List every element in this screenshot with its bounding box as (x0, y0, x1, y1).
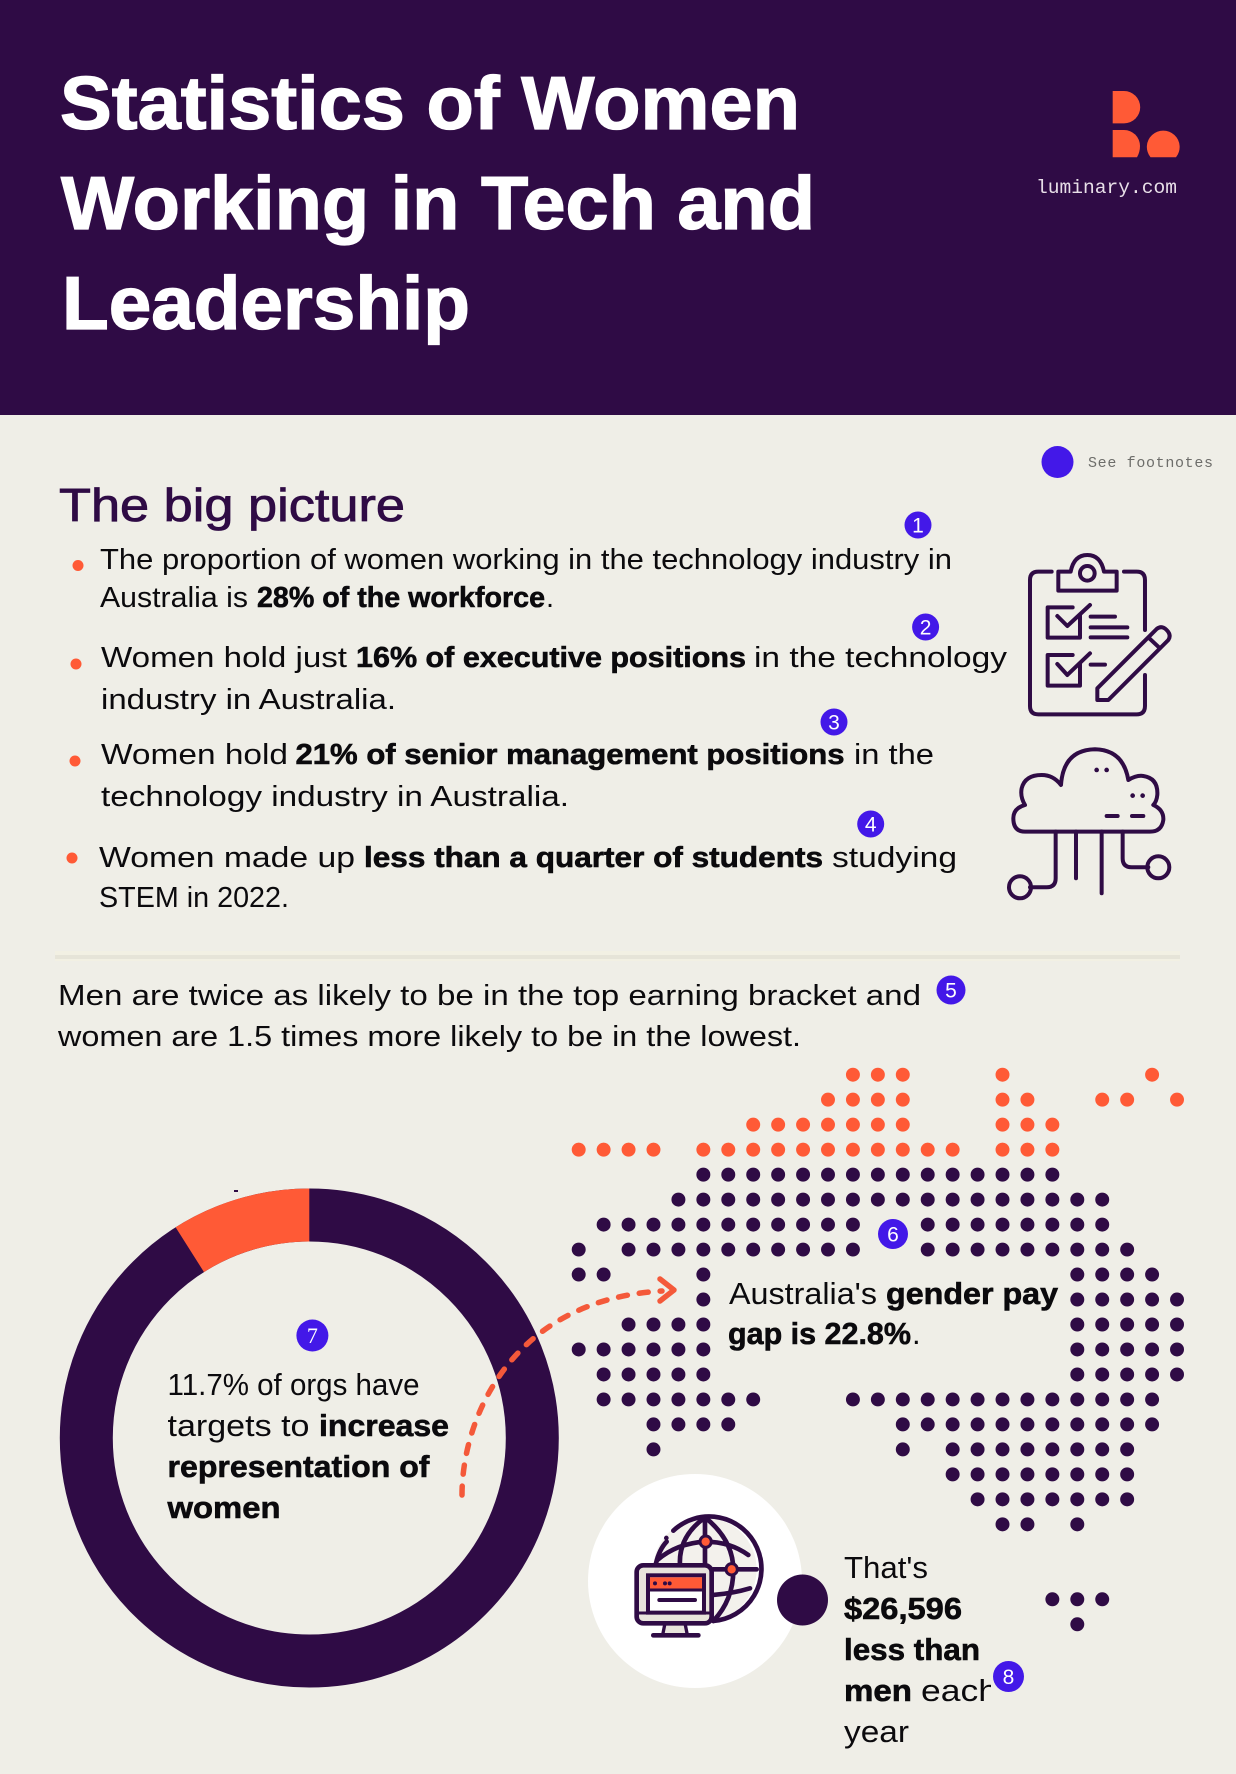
text: earnings bracket statement (57, 980, 921, 1053)
bullet 1: Australia is (100, 582, 248, 614)
footnote marker 2 (912, 614, 939, 640)
text: org targets: 11.7% of orgs have (168, 1367, 420, 1402)
bullet 2: in the technology (754, 642, 1008, 674)
text: org targets (166, 1367, 449, 1525)
bullet 3: in the (854, 739, 934, 771)
arrow: donut to map (462, 1279, 674, 1495)
text: earnings bracket statement: women are 1.5 times more likely to be in the lowest. (57, 1021, 801, 1053)
text: org targets: women (166, 1490, 280, 1525)
bullet 4: STEM in 2022. (99, 882, 289, 914)
dot map of Australia (579, 1075, 1177, 1624)
text: gender pay gap: Australia's (729, 1276, 877, 1311)
bullet 3: 21% of senior management positions (296, 739, 844, 771)
footnote marker 5 (936, 976, 966, 1004)
footnote marker 4: 4 (865, 814, 877, 836)
footnote marker 8 (993, 1661, 1024, 1692)
bullet 1: The proportion of women working in the technology industry in (100, 544, 952, 576)
footnote marker 6: 6 (887, 1224, 899, 1246)
footnote marker 3: 3 (828, 712, 840, 734)
title: Leadership (62, 261, 470, 345)
legend: see footnotes: See footnotes (1088, 455, 1213, 472)
bullet 3: technology industry in Australia. (101, 781, 569, 813)
logo: luminary: luminary.com (1036, 177, 1177, 199)
text: gender pay gap: gap is 22.8% (728, 1316, 911, 1351)
footnote marker 7 (296, 1320, 328, 1352)
icon: cloud network (1009, 749, 1169, 898)
bullet 3 (70, 739, 934, 813)
text: dollar pay difference: year (844, 1714, 909, 1749)
text: dollar pay difference: each (921, 1673, 998, 1708)
text: org targets: representation of (168, 1449, 430, 1484)
title: Working in Tech and (61, 161, 815, 245)
footnote marker 7: 7 (307, 1323, 318, 1348)
footnote marker 4 (857, 810, 884, 838)
title (60, 61, 815, 345)
footnote marker 3 (820, 708, 848, 736)
bullet 4 (66, 842, 957, 914)
text: dollar pay difference: less than (844, 1632, 980, 1667)
bullet 1 (72, 544, 952, 614)
logo: luminary (1036, 91, 1180, 199)
icon: clipboard checklist (1030, 555, 1170, 714)
bullet 2 (70, 642, 1008, 716)
footnote marker 1 (904, 512, 932, 538)
header panel (0, 0, 1236, 415)
bullet 2: Women hold just (101, 642, 347, 674)
bullet 4: studying (832, 842, 957, 874)
title: Statistics of Women (60, 61, 800, 145)
bullet 4: Women made up (99, 842, 355, 874)
text: dollar pay difference: men (844, 1673, 912, 1708)
bullet 2: industry in Australia. (101, 684, 396, 716)
legend: see footnotes (1042, 446, 1213, 478)
bullet 1: . (546, 582, 554, 614)
text: gender pay gap: . (912, 1316, 921, 1351)
text: org targets: targets to (168, 1408, 310, 1443)
text: dollar pay difference: $26,596 (844, 1591, 962, 1626)
footnote marker 6 (878, 1219, 908, 1249)
map: orange dots (579, 1075, 1177, 1150)
text: gender pay gap (728, 1276, 1059, 1351)
bullet 4: less than a quarter of students (364, 842, 823, 874)
text: gender pay gap: gender pay (886, 1276, 1059, 1311)
text: dollar pay difference: That's (844, 1550, 928, 1585)
footnote marker 5: 5 (945, 980, 957, 1002)
footnote marker 2: 2 (920, 616, 931, 640)
icon: globe and monitor (637, 1516, 761, 1635)
bullet 1: 28% of the workforce (257, 582, 545, 614)
footnote marker 8: 8 (1003, 1666, 1014, 1689)
text: org targets: increase (319, 1408, 449, 1443)
heading: the big picture: The big picture (59, 479, 405, 531)
footnote marker 1: 1 (912, 514, 924, 538)
bullet 3: Women hold (101, 739, 288, 771)
white circle with globe icon (588, 1474, 802, 1688)
text: earnings bracket statement: Men are twice as likely to be in the top earning bracket and (58, 980, 921, 1012)
bullet 2: 16% of executive positions (356, 642, 746, 674)
text: dollar pay difference (844, 1550, 1002, 1749)
donut chart: 11.7% (86, 1188, 532, 1661)
connector dot (777, 1574, 828, 1626)
map: purple dots (579, 1175, 1177, 1624)
